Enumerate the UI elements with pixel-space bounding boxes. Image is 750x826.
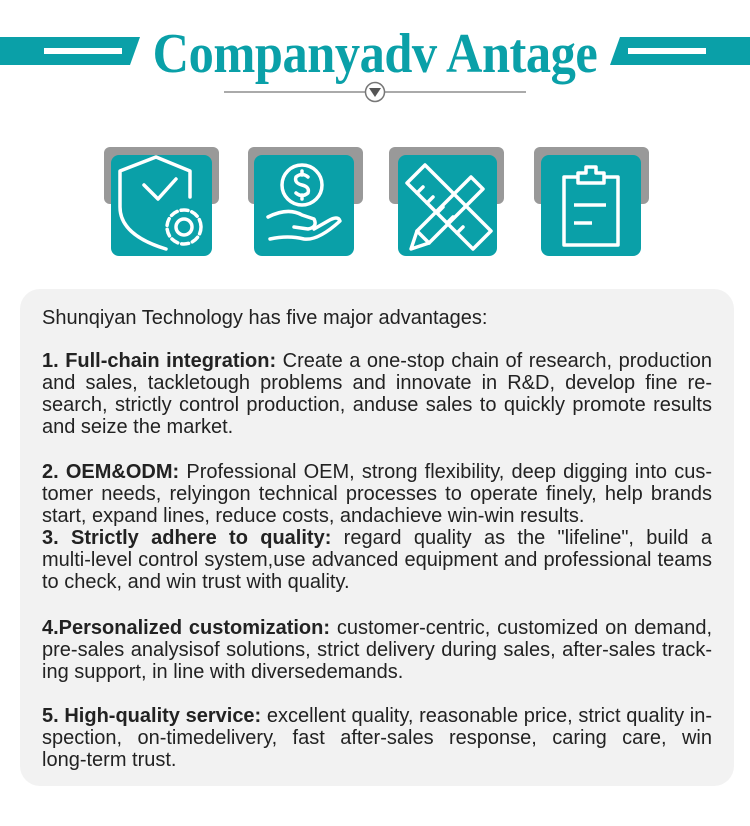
item 4: 4.Personalized customization: customer-centric, customized on demand, [42,617,712,639]
header left bar [0,37,140,65]
intro text: Shunqiyan Technology has five major advantages: [42,307,487,329]
header right bar [610,37,750,65]
item 3 [42,527,712,593]
item 1: and sales, tackletough problems and innovate in R&D, develop fine re- [42,372,712,394]
item 2 [42,461,712,527]
item 4: pre-sales analysisof solutions, strict delivery during sales, after-sales track- [42,639,712,661]
item 4 [42,617,712,683]
item 1: 1. Full-chain integration: Create a one-stop chain of research, production [42,350,712,372]
item 4: ing support, in line with diversedemands. [42,661,403,683]
divider with chevron [224,82,526,102]
item 3: 3. Strictly adhere to quality: regard quality as the "lifeline", build a [42,527,712,549]
icon: clipboard [534,147,649,256]
panel: advantages text [20,289,734,786]
item 2: 2. OEM&ODM: Professional OEM, strong flexibility, deep digging into cus- [42,461,712,483]
item 2: start, expand lines, reduce costs, andachieve win-win results. [42,505,584,527]
item 5: long-term trust. [42,749,176,771]
icon: money in hand [248,147,363,256]
item 5 [42,705,712,771]
item 3: to check, and win trust with quality. [42,571,350,593]
item 5: 5. High-quality service: excellent quality, reasonable price, strict quality in- [42,705,712,727]
item 5: spection, on-timedelivery, fast after-sales response, caring care, win [42,727,712,749]
title: Companyadv Antage [153,23,597,85]
item 2: tomer needs, relyingon technical processes to operate finely, help brands [42,483,712,505]
item 1: search, strictly control production, anduse sales to quickly promote results [42,394,712,416]
item 1 [42,350,712,438]
item 3: multi-level control system,use advanced equipment and professional teams [42,549,712,571]
icon: shield with gear [104,147,219,256]
item 1: and seize the market. [42,416,233,438]
icon: ruler and pencil [389,147,504,256]
